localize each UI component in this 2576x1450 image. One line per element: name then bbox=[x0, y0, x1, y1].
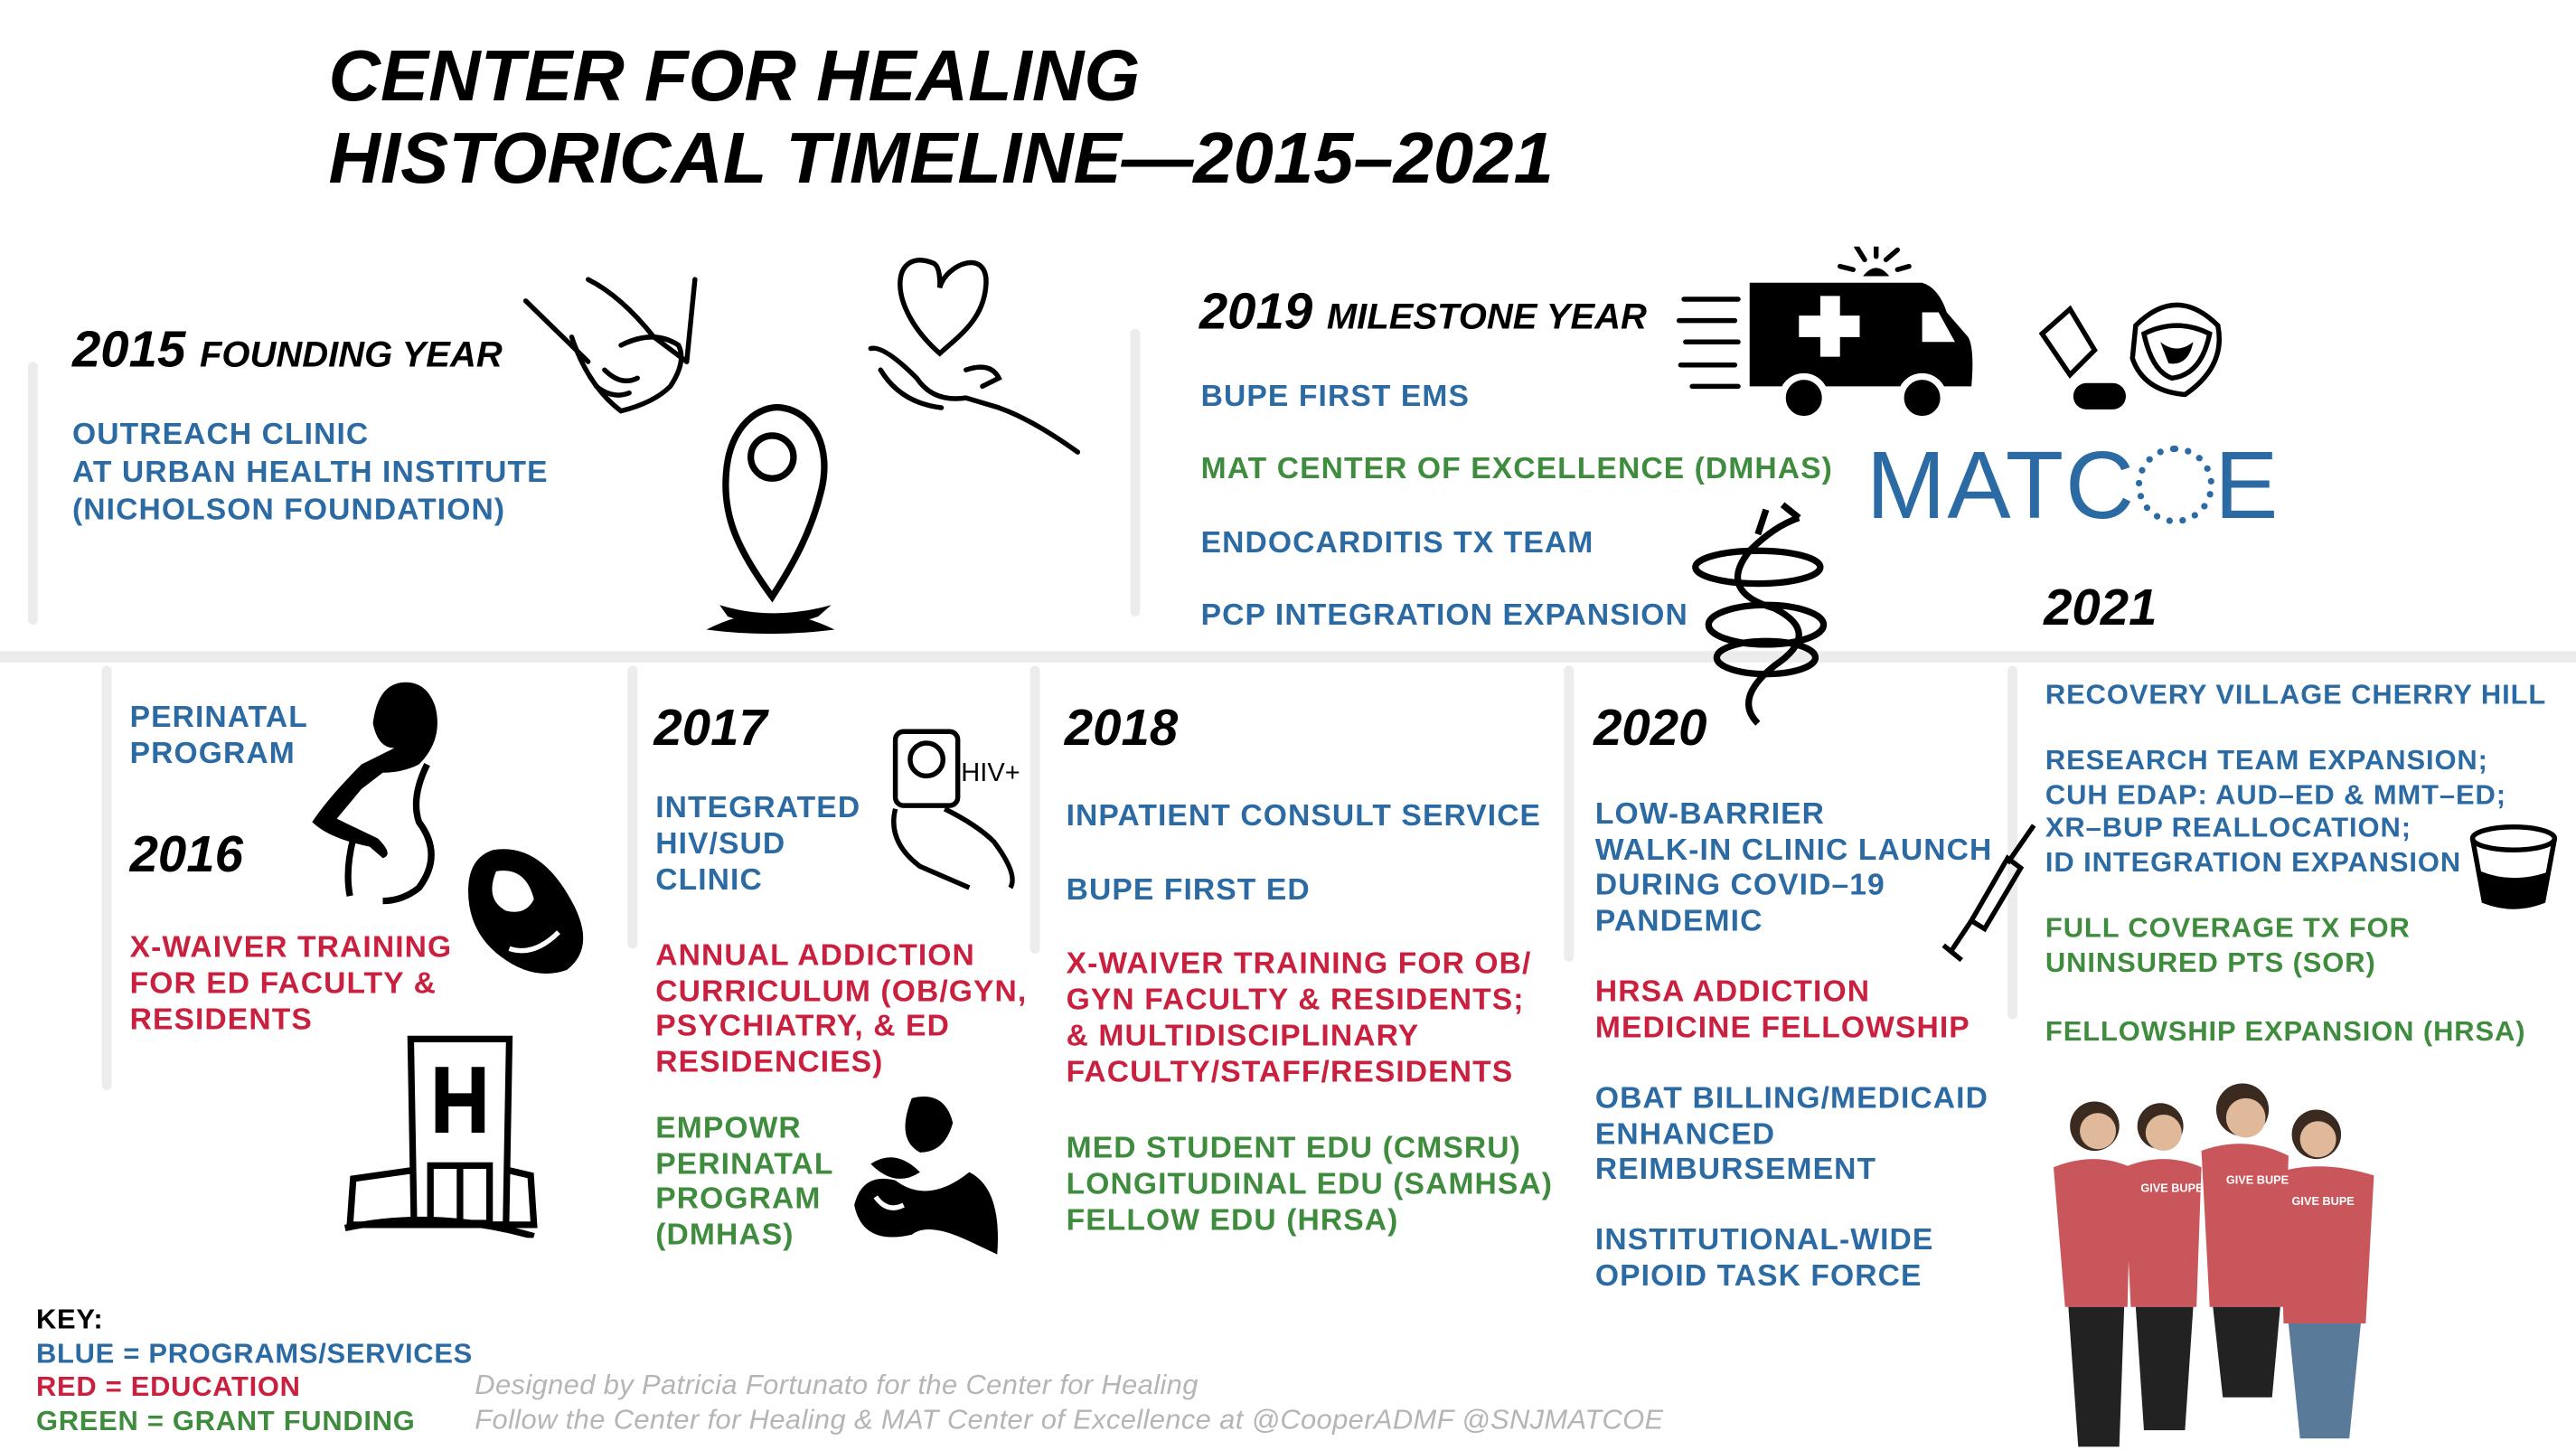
text: outreach clinic: AT URBAN HEALTH INSTITUTE bbox=[72, 454, 549, 488]
key bbox=[36, 1304, 473, 1436]
text: x-waiver ed: FOR ED FACULTY & bbox=[130, 965, 437, 1000]
text: pcp integration: PCP INTEGRATION EXPANSION bbox=[1201, 597, 1688, 631]
text: med student edu: LONGITUDINAL EDU (SAMHSA) bbox=[1067, 1165, 1553, 1200]
icon: mother and child bbox=[854, 1097, 998, 1255]
text: empowr: PROGRAM bbox=[655, 1181, 821, 1215]
text: outreach clinic: (NICHOLSON FOUNDATION) bbox=[72, 492, 505, 526]
text: recovery village: RECOVERY VILLAGE CHERRY HILL bbox=[2045, 679, 2546, 711]
photo: team: GIVE BUPE bbox=[2292, 1194, 2355, 1208]
icon: hospital bbox=[343, 1036, 538, 1238]
text: obat billing: OBAT BILLING/MEDICAID bbox=[1595, 1080, 1988, 1115]
key: KEY: bbox=[36, 1304, 103, 1335]
text: hrsa fellowship: MEDICINE FELLOWSHIP bbox=[1595, 1009, 1970, 1043]
text: empowr: EMPOWR bbox=[655, 1110, 802, 1144]
credits bbox=[475, 1370, 1664, 1436]
icon: syringe bbox=[1941, 824, 2035, 962]
text: research team: RESEARCH TEAM EXPANSION; bbox=[2045, 745, 2488, 776]
text: annual addiction curriculum: RESIDENCIES) bbox=[655, 1043, 883, 1078]
photo: team: GIVE BUPE bbox=[2226, 1172, 2289, 1186]
title: HISTORICAL TIMELINE—2015–2021 bbox=[329, 118, 1554, 199]
panel: 2021 bbox=[2043, 579, 2546, 1047]
panel: 2020 bbox=[1593, 699, 1992, 1292]
text: outreach clinic: OUTREACH CLINIC bbox=[72, 416, 369, 450]
text: full coverage bbox=[2045, 912, 2411, 978]
heading: 2017: 2017 bbox=[653, 699, 767, 757]
heading: 2015 founding year: 2015 FOUNDING YEAR bbox=[72, 321, 503, 378]
text: obat billing: REIMBURSEMENT bbox=[1595, 1151, 1876, 1185]
text: x-waiver ob/gyn: FACULTY/STAFF/RESIDENTS bbox=[1067, 1054, 1513, 1088]
text: empowr: PERINATAL bbox=[655, 1145, 833, 1180]
text: fellowship expansion: FELLOWSHIP EXPANSION (HRSA) bbox=[2045, 1016, 2525, 1047]
panel: 2019 bbox=[1199, 283, 1833, 631]
heading: 2019 milestone year: 2019 MILESTONE YEAR bbox=[1199, 283, 1647, 340]
text: low-barrier clinic: WALK-IN CLINIC LAUNCH bbox=[1595, 831, 1992, 865]
text: x-waiver ed: RESIDENTS bbox=[130, 1002, 313, 1036]
text: hrsa fellowship bbox=[1595, 974, 1970, 1043]
icon: baby bbox=[468, 849, 584, 974]
icon: ambulance bbox=[1676, 246, 1972, 416]
text: annual addiction curriculum: ANNUAL ADDICTION bbox=[655, 937, 975, 972]
panel: 2016 bbox=[128, 699, 452, 1036]
logo: MATCOE: MATC E bbox=[1866, 432, 2280, 540]
text: opioid task force bbox=[1595, 1221, 1933, 1292]
text: integrated hiv: CLINIC bbox=[655, 862, 763, 896]
icon: hiv test: HIV+ bbox=[961, 758, 1020, 787]
text: inpatient consult: INPATIENT CONSULT SERVICE bbox=[1067, 797, 1541, 832]
text: hrsa fellowship: HRSA ADDICTION bbox=[1595, 974, 1870, 1008]
text: research team: ID INTEGRATION EXPANSION bbox=[2045, 846, 2461, 877]
credits: Designed by Patricia Fortunato for the Center for Healing bbox=[475, 1370, 1199, 1400]
icon: map pin bbox=[707, 404, 835, 635]
icon: virus swirl bbox=[1692, 503, 1828, 726]
text: empowr: (DMHAS) bbox=[655, 1216, 794, 1250]
icon: pregnant woman bbox=[312, 682, 437, 904]
panel: 2018 bbox=[1063, 699, 1553, 1237]
key: RED = EDUCATION bbox=[36, 1371, 301, 1402]
heading: 2018: 2018 bbox=[1065, 699, 1178, 757]
text: empowr bbox=[655, 1110, 833, 1251]
photo: team bbox=[2054, 1083, 2374, 1446]
key: GREEN = GRANT FUNDING bbox=[36, 1405, 416, 1436]
text: med student edu: FELLOW EDU (HRSA) bbox=[1067, 1201, 1398, 1237]
text: x-waiver ob/gyn bbox=[1067, 946, 1531, 1088]
title bbox=[329, 36, 1554, 199]
text: opioid task force: INSTITUTIONAL-WIDE bbox=[1595, 1221, 1933, 1256]
text: opioid task force: OPIOID TASK FORCE bbox=[1595, 1257, 1923, 1292]
text: x-waiver ed bbox=[130, 929, 452, 1036]
text: research team: CUH EDAP: AUD–ED & MMT–ED; bbox=[2045, 778, 2506, 810]
text: perinatal program: PERINATAL bbox=[130, 699, 308, 733]
text: annual addiction curriculum: CURRICULUM (OB/GYN, bbox=[655, 973, 1027, 1007]
text: integrated hiv: HIV/SUD bbox=[655, 825, 785, 860]
text: low-barrier clinic: PANDEMIC bbox=[1595, 902, 1763, 937]
icon: pill and mouth bbox=[2039, 302, 2222, 410]
key: BLUE = PROGRAMS/SERVICES bbox=[36, 1337, 473, 1369]
icon: hiv test bbox=[891, 729, 1020, 890]
text: endocarditis: ENDOCARDITIS TX TEAM bbox=[1201, 524, 1594, 559]
text: low-barrier clinic bbox=[1594, 796, 1992, 937]
text: full coverage: UNINSURED PTS (SOR) bbox=[2045, 946, 2376, 977]
text: med student edu bbox=[1067, 1129, 1553, 1237]
text: mat center of excellence: MAT CENTER OF EXCELLENCE (DMHAS) bbox=[1201, 450, 1833, 485]
text: integrated hiv bbox=[655, 789, 860, 896]
photo: team: GIVE BUPE bbox=[2140, 1181, 2204, 1194]
text: x-waiver ob/gyn: GYN FACULTY & RESIDENTS; bbox=[1067, 982, 1525, 1016]
text: perinatal program bbox=[130, 699, 308, 769]
text: bupe first ed: BUPE FIRST ED bbox=[1067, 871, 1311, 906]
text: x-waiver ed: X-WAIVER TRAINING bbox=[130, 929, 452, 964]
text: low-barrier clinic: DURING COVID–19 bbox=[1595, 866, 1885, 901]
text: obat billing bbox=[1595, 1080, 1988, 1185]
text: research team bbox=[2045, 745, 2506, 877]
icon: medicine cup bbox=[2469, 824, 2558, 909]
icon: holding hands bbox=[522, 277, 698, 414]
text: outreach clinic bbox=[72, 416, 549, 526]
text: full coverage: FULL COVERAGE TX FOR bbox=[2045, 912, 2411, 944]
text: annual addiction curriculum: PSYCHIATRY, & ED bbox=[655, 1008, 950, 1042]
text: x-waiver ob/gyn: X-WAIVER TRAINING FOR OB/ bbox=[1067, 946, 1531, 980]
text: x-waiver ob/gyn: & MULTIDISCIPLINARY bbox=[1067, 1018, 1419, 1052]
text: annual addiction curriculum bbox=[655, 937, 1027, 1078]
text: bupe first ems: BUPE FIRST EMS bbox=[1201, 378, 1470, 412]
text: research team: XR–BUP REALLOCATION; bbox=[2045, 812, 2411, 843]
panel: 2015 bbox=[71, 321, 549, 526]
heading: 2016: 2016 bbox=[130, 825, 243, 883]
text: low-barrier clinic: LOW-BARRIER bbox=[1595, 796, 1825, 830]
panel: 2017 bbox=[653, 699, 1027, 1251]
icon: heart in hand bbox=[868, 258, 1081, 455]
text: med student edu: MED STUDENT EDU (CMSRU) bbox=[1067, 1129, 1521, 1164]
text: perinatal program: PROGRAM bbox=[130, 735, 296, 769]
text: integrated hiv: INTEGRATED bbox=[655, 789, 860, 824]
text: obat billing: ENHANCED bbox=[1595, 1116, 1775, 1150]
heading: 2021: 2021 bbox=[2044, 579, 2157, 636]
title: CENTER FOR HEALING bbox=[329, 36, 1140, 117]
heading: 2020: 2020 bbox=[1594, 699, 1706, 757]
credits: Follow the Center for Healing & MAT Center of Excellence at @CooperADMF @SNJMATCOE bbox=[475, 1403, 1664, 1435]
